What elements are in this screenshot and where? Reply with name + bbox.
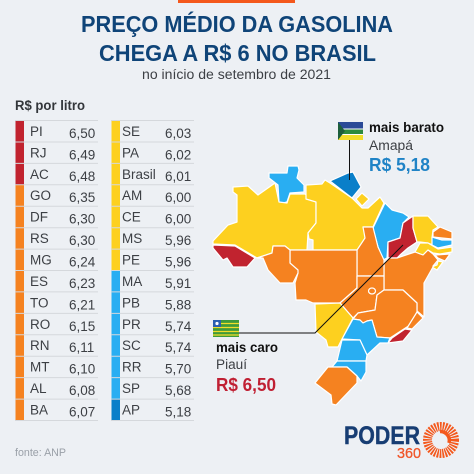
row: CE: CE [122,210,141,225]
row: AP [122,402,191,419]
state name: Piauí [216,357,247,372]
row: Brasil [122,167,191,184]
price: R$ 6,50 [216,375,276,395]
row: RR: RR [122,360,142,375]
price: R$ 5,18 [369,155,430,175]
row: MS [122,231,191,248]
source: fonte: ANP [15,447,66,459]
state: RS [315,367,357,405]
title [81,10,393,66]
state: PR [337,340,367,361]
row: ES: ES [30,274,48,289]
row: AC: 6,48 [69,169,95,184]
row: MT [30,360,95,377]
row: RO: 6,15 [69,319,95,334]
row: RR: 5,70 [165,362,191,377]
icon: sun [428,426,454,454]
row: SC: 5,74 [165,340,192,355]
row: MS: 5,96 [165,233,191,248]
row: PE [122,252,191,270]
row: AP: AP [122,402,140,417]
row: PE: 5,96 [165,254,191,270]
row: SP [122,381,191,398]
row: PA [122,145,191,162]
state: RJ [388,329,412,343]
row: RS: 6,30 [69,233,95,248]
row: AM: AM [122,188,142,203]
row: BA: BA [30,402,48,417]
row: SE [122,124,191,141]
state: PE [415,243,452,255]
state: AL [435,254,450,261]
row: PE: PE [122,252,140,268]
row: SC: SC [122,338,141,353]
row: TO: TO [30,295,49,310]
row: MT: MT [30,360,50,375]
row: SC [122,338,192,355]
row: RN: RN [30,338,50,353]
row: ES: 6,23 [69,276,95,291]
state: RO [257,246,298,283]
row: DF [30,210,95,227]
row: SP: SP [122,381,140,396]
row: RR [122,360,191,377]
row: RS [30,231,95,248]
row: MA [122,274,191,291]
row: RJ [30,145,95,162]
row: PB [122,295,191,312]
row: RO: RO [30,317,50,332]
row: BA [30,402,95,419]
number 360: 360 [397,445,421,462]
row: BA: 6,07 [69,404,95,419]
row: PA: 6,02 [165,147,191,162]
row: GO [30,188,95,205]
row: GO: 6,35 [69,190,95,205]
row: AL: 6,08 [69,383,95,398]
row: PR: PR [122,317,141,332]
state: PI [388,216,417,258]
row: SE: 6,03 [165,126,191,141]
state: MA [373,203,409,260]
island: Marajó [356,193,369,206]
state: RR [269,166,304,203]
feature: DF [368,288,376,294]
row: PB: PB [122,295,140,310]
row: RJ: RJ [30,145,46,160]
row: TO: 6,21 [69,297,95,312]
row: AL: AL [30,381,47,396]
row: DF: DF [30,210,48,225]
state name: Amapá [369,138,413,153]
pointer line [239,245,403,333]
row: GO: GO [30,188,51,203]
row: AC: AC [30,167,49,182]
logo: Poder360 [344,422,454,462]
row: PR: 5,74 [165,319,192,334]
row: ES [30,274,95,291]
row: TO [30,295,95,312]
row: RS: RS [30,231,49,246]
row: AL [30,381,95,398]
state: SC [332,361,366,381]
state: MG [353,290,417,338]
row: MG: 6,24 [69,254,96,270]
callout: mais barato [338,120,444,180]
callout: mais caro [213,245,403,395]
wordmark: PODER [344,422,420,450]
row: SE: SE [122,124,140,139]
state: BA [384,250,438,317]
row: PI: 6,50 [69,126,95,141]
row: AM: 6,00 [165,190,191,205]
map of Brazil [213,166,452,405]
row: RN: 6,11 [69,340,94,355]
row: DF: 6,30 [69,212,95,227]
state: AC [213,245,255,267]
label: mais caro [216,340,278,355]
state: TO [357,227,384,276]
state: MS [315,303,353,347]
row: CE [122,210,191,227]
row: AC [30,167,95,184]
row: MS: MS [122,231,142,246]
row: PB: 5,88 [165,297,191,312]
table: left column [15,120,98,420]
state: ES [407,312,423,329]
state: PA [306,180,384,250]
label: mais barato [369,120,444,135]
icon: flag of Amapá [338,122,363,140]
pointer line [348,140,350,180]
row: SP: 5,68 [165,383,191,398]
row: MG: MG [30,252,52,268]
row: RO [30,317,95,334]
icon: flag of Piauí [213,320,239,337]
state: SP [342,319,390,355]
row: RJ: 6,49 [69,147,95,162]
row: MA: MA [122,274,142,289]
state: MT [290,250,357,303]
state: PB [432,237,452,248]
row: PR [122,317,192,334]
row: AM [122,188,191,205]
state: AM [213,183,316,258]
row: MG [30,252,96,270]
row: Brasil: Brasil [122,167,156,182]
row: MA: 5,91 [165,276,191,291]
row: PI: PI [30,124,43,139]
row: RN [30,338,94,355]
row: MT: 6,10 [69,362,95,377]
state: CE [413,216,438,245]
title: PREÇO MÉDIO DA GASOLINA [81,10,393,37]
state: RN [433,227,452,239]
row: CE: 6,00 [165,212,191,227]
state: GO [340,276,384,318]
row: PI [30,124,95,141]
table: right column [111,120,194,420]
state: AP [330,172,361,198]
row: Brasil: 6,01 [165,169,191,184]
row: AP: 5,18 [165,404,191,419]
title: CHEGA A R$ 6 NO BRASIL [99,40,376,66]
table heading: R$ por litro [15,98,85,113]
state: SE [432,261,443,270]
row: PA: PA [122,145,139,160]
top orange bar [178,0,295,3]
subtitle: no início de setembro de 2021 [142,67,331,82]
